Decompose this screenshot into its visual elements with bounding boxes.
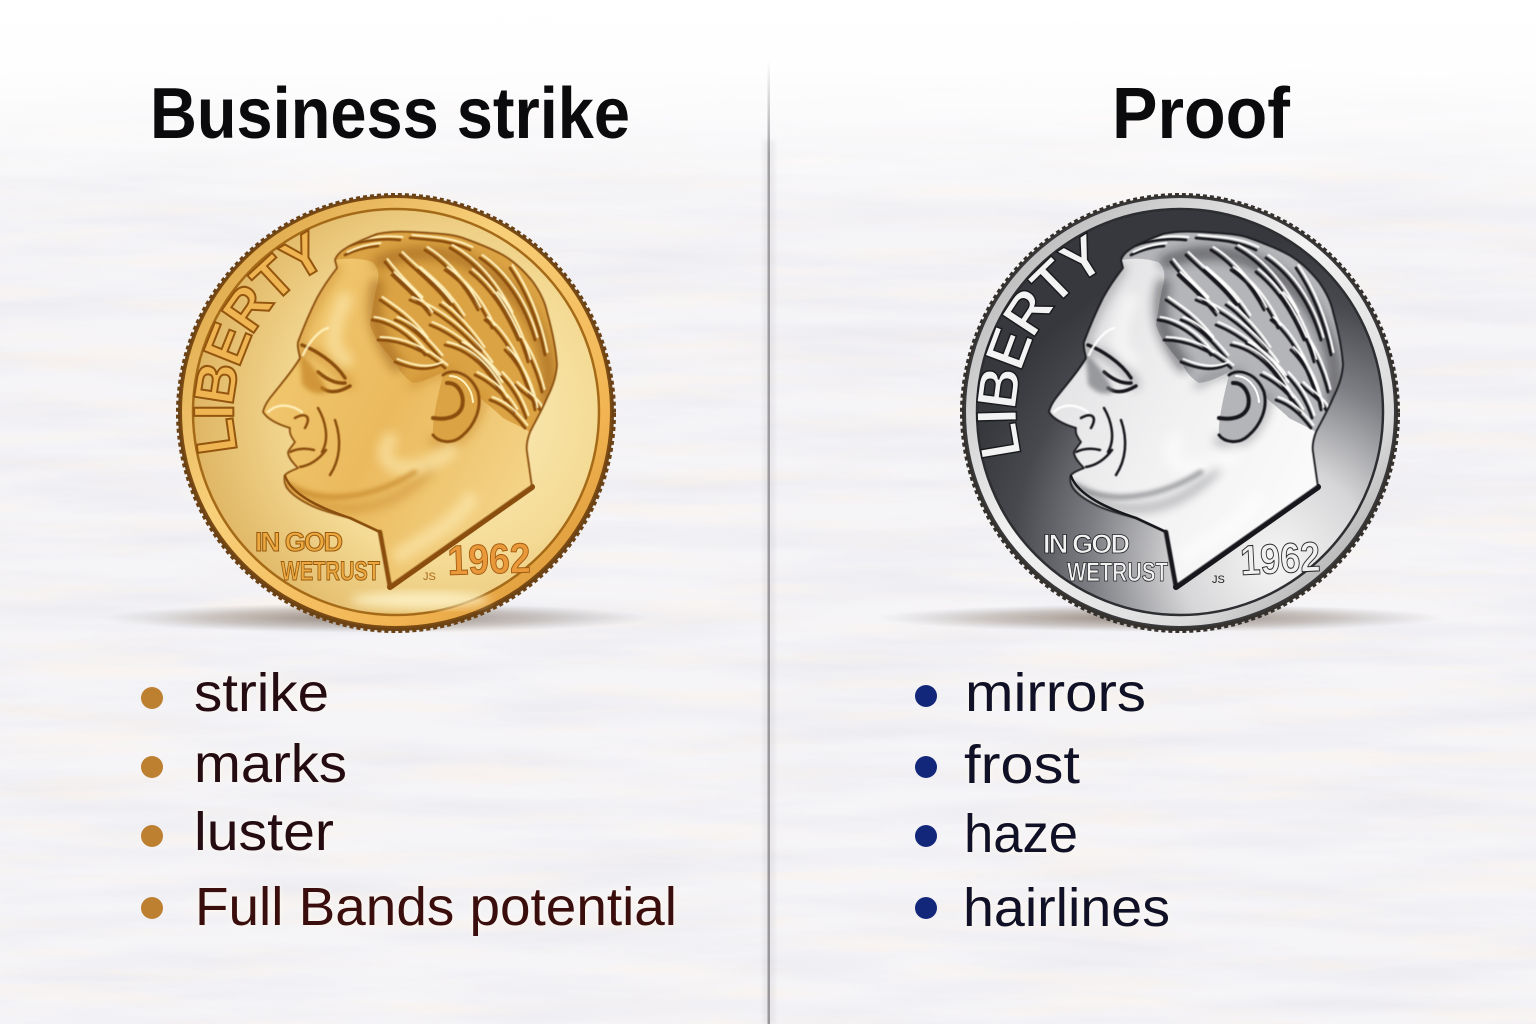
- bullet item: hairlines: hairlines: [963, 878, 1170, 938]
- list: proof: [915, 663, 1170, 938]
- bullet item: haze: [915, 804, 1078, 864]
- bottom highlight: [350, 592, 490, 608]
- reeded edge: [178, 195, 614, 631]
- field: [977, 209, 1383, 615]
- motto: IN GOD WE TRUST: [1043, 529, 1168, 587]
- list: business strike: [141, 663, 677, 937]
- bullet item: haze: haze: [964, 804, 1078, 864]
- legend: LIBERTY: LIBERTY: [193, 228, 318, 454]
- heading: Proof: Proof: [1112, 74, 1291, 154]
- legend: LIBERTY: LIBERTY: [976, 232, 1098, 458]
- date: 1962: 1962: [447, 534, 531, 584]
- motto: IN GOD WE TRUST: WETRUST: [1067, 557, 1168, 587]
- bullet item: frost: [915, 735, 1080, 795]
- field: [193, 209, 599, 615]
- date: 1962: 1962: [1239, 533, 1321, 584]
- coin shadow: [875, 604, 1445, 632]
- bullet item: strike: [141, 663, 329, 723]
- bullet item: luster: luster: [194, 802, 334, 862]
- bullet item: luster: [141, 802, 334, 862]
- heading: Business strike: Business strike: [150, 74, 630, 154]
- bullet item: Full Bands potential: Full Bands potential: [195, 877, 677, 937]
- portrait: [263, 232, 557, 587]
- rim: [965, 197, 1395, 627]
- bullet item: frost: frost: [964, 735, 1080, 795]
- bullet item: mirrors: mirrors: [965, 663, 1146, 723]
- coin: proof: [897, 193, 1422, 633]
- motto: IN GOD WE TRUST: IN GOD: [255, 527, 343, 557]
- motto: IN GOD WE TRUST: IN GOD: [1043, 529, 1130, 559]
- bullet item: strike: strike: [194, 663, 329, 723]
- coin shadow: [100, 603, 650, 633]
- portrait: [1049, 232, 1343, 587]
- motto: IN GOD WE TRUST: [255, 527, 380, 586]
- coin: business strike: [122, 193, 627, 633]
- rim: [181, 197, 611, 627]
- motto: IN GOD WE TRUST: WETRUST: [281, 556, 380, 586]
- mintmark: JS: [1212, 574, 1225, 586]
- reeded edge: [962, 195, 1398, 631]
- center divider: [763, 60, 775, 1024]
- bullet item: marks: marks: [194, 734, 347, 794]
- mintmark: JS: [423, 571, 436, 583]
